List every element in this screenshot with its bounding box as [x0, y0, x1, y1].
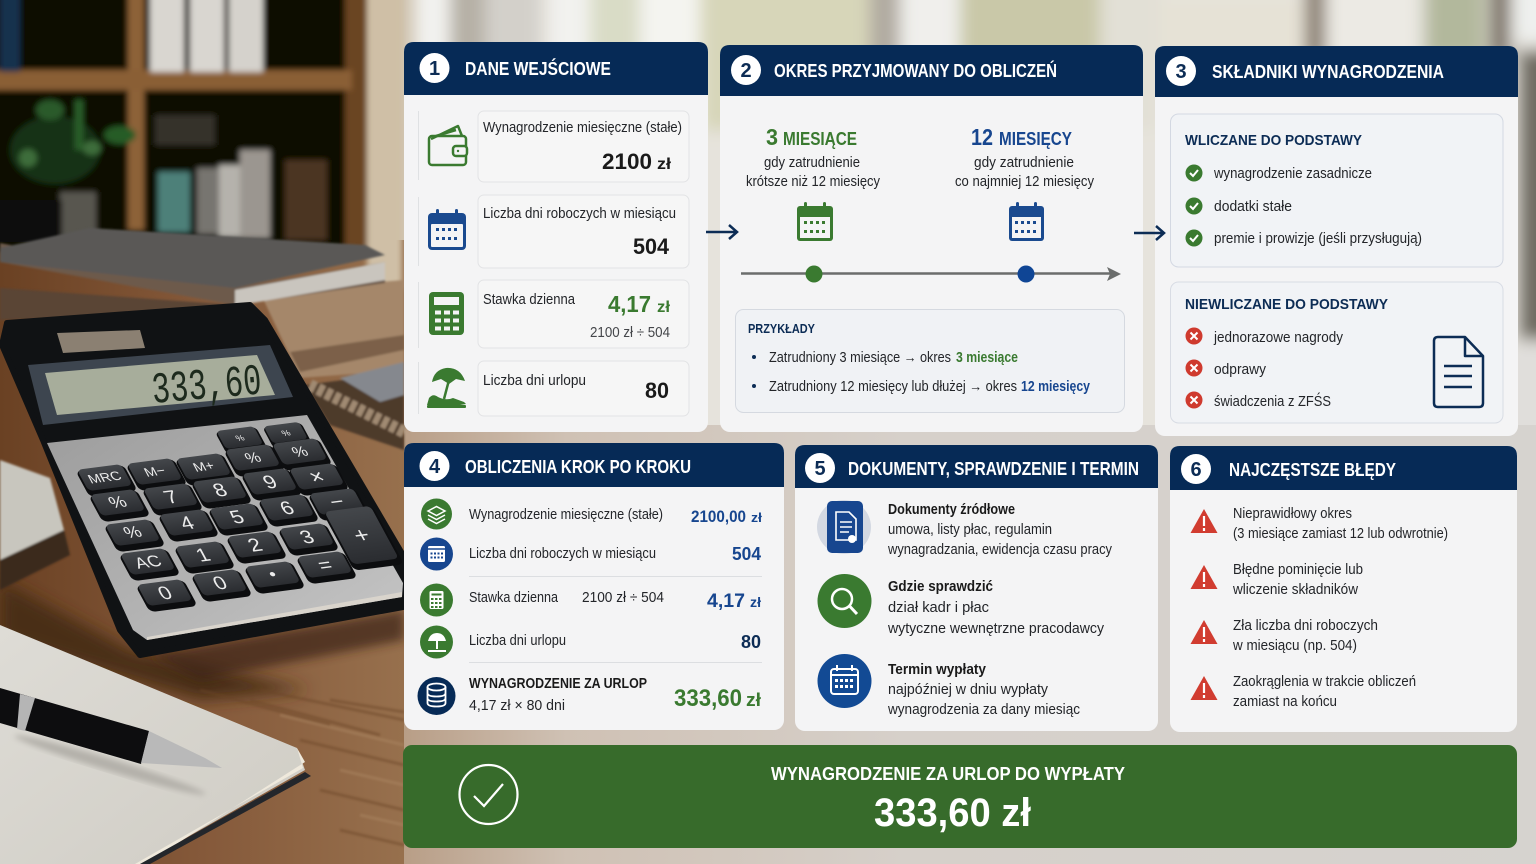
background: blurred window: [370, 0, 1536, 465]
row: liczba dni roboczych: [420, 538, 761, 570]
row: wynagrodzenie za urlop: WYNAGRODZENIE ZA URLOP: [469, 676, 647, 692]
background: bookshelf: [0, 0, 402, 290]
input: liczba dni urlopu: [478, 361, 689, 416]
background: grey book stack: [0, 228, 404, 590]
error: zła liczba dni: Zła liczba dni roboczych: [1233, 618, 1378, 634]
input: wynagrodzenie miesięczne: zł: [657, 156, 672, 173]
error: błędne pominięcie: [1190, 562, 1363, 598]
examples box: [736, 310, 1124, 412]
error: błędne pominięcie: wliczenie składników: [1232, 582, 1358, 598]
icon: calendar blue: [1009, 202, 1044, 241]
header 5: [795, 445, 1158, 488]
box: niewliczane do podstawy: NIEWLICZANE DO PODSTAWY: [1185, 296, 1388, 313]
box: niewliczane do podstawy: [1170, 282, 1503, 423]
item: gdzie sprawdzić: dział kadr i płac: [888, 600, 989, 616]
item: termin wypłaty: [818, 654, 1080, 718]
box: wliczane do podstawy: WLICZANE DO PODSTAWY: [1185, 132, 1362, 149]
row: liczba dni urlopu: [420, 626, 761, 658]
calculator keys: %: [242, 450, 264, 467]
input: liczba dni urlopu: Liczba dni urlopu: [483, 373, 586, 389]
header 6: NAJCZĘSTSZE BŁĘDY: [1229, 459, 1397, 480]
option: 3 miesiące: gdy zatrudnienie: [764, 155, 860, 171]
examples box: 12 miesięcy: [1021, 379, 1090, 395]
error: nieprawidłowy okres: Nieprawidłowy okres: [1233, 506, 1352, 522]
box: wliczane do podstawy: wynagrodzenie zasadnicze: [1213, 166, 1372, 182]
input: wynagrodzenie miesięczne: [478, 111, 689, 182]
row: stawka dzienna: 2100 zł ÷ 504: [582, 590, 664, 606]
box: wliczane do podstawy: dodatki stałe: [1214, 199, 1292, 215]
error: zła liczba dni: [1190, 618, 1378, 654]
examples box: PRZYKŁADY: [748, 321, 815, 336]
item: termin wypłaty: Termin wypłaty: [888, 662, 986, 678]
calculator keys: M+: [190, 458, 217, 474]
background: pale table: [395, 425, 1536, 864]
row: stawka dzienna: Stawka dzienna: [469, 590, 559, 606]
input: liczba dni roboczych: [478, 195, 689, 268]
icon: document outline: [1434, 337, 1483, 407]
option: 12 miesięcy: MIESIĘCY: [999, 129, 1072, 149]
arrow: panel 1 to 2: [706, 225, 737, 239]
panel 2: okres przyjmowany do obliczeń: [720, 45, 1143, 432]
panel 6: najczęstsze błędy: [1170, 446, 1517, 732]
header 4: [404, 443, 784, 487]
item: gdzie sprawdzić: wytyczne wewnętrzne pracodawcy: [887, 621, 1105, 637]
row: stawka dzienna: 4,17: [707, 591, 745, 612]
option: 3 miesiące: krótsze niż 12 miesięcy: [746, 174, 881, 190]
item: dokumenty źródłowe: umowa, listy płac, regulamin: [888, 522, 1052, 538]
option: 3 miesiące: [746, 124, 881, 190]
input: stawka dzienna: Stawka dzienna: [483, 292, 576, 308]
panel 4: obliczenia krok po kroku: [404, 443, 784, 730]
error: zaokrąglenia: Zaokrąglenia w trakcie obliczeń: [1233, 674, 1416, 690]
option: 12 miesięcy: 12: [971, 124, 993, 150]
calculator keys: +: [349, 524, 375, 548]
error: nieprawidłowy okres: (3 miesiące zamiast 12 lub odwrotnie): [1233, 526, 1448, 542]
result banner: WYNAGRODZENIE ZA URLOP DO WYPŁATY: [771, 764, 1125, 784]
input: wynagrodzenie miesięczne: 2100: [602, 149, 652, 174]
item: dokumenty źródłowe: [817, 500, 1113, 558]
input: stawka dzienna: [478, 280, 689, 348]
row: wynagrodzenie miesięczne: [421, 498, 762, 530]
result banner: 333,60 zł: [874, 791, 1031, 835]
header 1: [404, 42, 708, 95]
error: nieprawidłowy okres: [1190, 506, 1448, 542]
row: liczba dni roboczych: Liczba dni roboczych w miesiącu: [469, 546, 656, 562]
row: wynagrodzenie za urlop: [418, 676, 761, 715]
row: wynagrodzenie miesięczne: zł: [751, 510, 762, 525]
icon: wallet: [429, 126, 467, 165]
icon: beach umbrella: [427, 368, 466, 408]
calculator keys: MRC: [85, 468, 124, 486]
calculator keys: M−: [141, 463, 168, 479]
calculator keys: 9: [259, 472, 281, 493]
calculator keys: %: [289, 444, 311, 461]
header 3: 3: [1175, 61, 1187, 83]
calculator keys: ×: [304, 465, 329, 488]
examples box: Zatrudniony 3 miesiące → okres: [769, 350, 951, 366]
input: stawka dzienna: 4,17: [608, 291, 651, 317]
box: wliczane do podstawy: [1170, 114, 1503, 267]
background: wooden desk: [0, 240, 404, 864]
input: liczba dni roboczych: 504: [633, 234, 670, 259]
calculator keys: 1: [192, 545, 214, 566]
header 4: OBLICZENIA KROK PO KROKU: [465, 456, 691, 477]
input: stawka dzienna: zł: [657, 299, 671, 316]
row: liczba dni roboczych: 504: [732, 544, 761, 564]
row: wynagrodzenie za urlop: zł: [746, 690, 761, 710]
header 1: DANE WEJŚCIOWE: [465, 58, 611, 79]
calculator keys: •: [265, 565, 280, 583]
calculator keys: 4: [176, 513, 198, 534]
examples box: Zatrudniony 12 miesięcy lub dłużej → okres: [769, 379, 1017, 395]
option: 12 miesięcy: [955, 124, 1095, 190]
icon: check circle: [460, 765, 518, 824]
result banner: [403, 745, 1517, 848]
panel 1: dane wejściowe: [404, 42, 708, 432]
item: termin wypłaty: wynagrodzenia za dany miesiąc: [887, 702, 1080, 718]
option: 3 miesiące: MIESIĄCE: [783, 129, 857, 149]
calculator keys: −: [324, 490, 349, 513]
header 6: 6: [1190, 459, 1202, 481]
item: termin wypłaty: najpóźniej w dniu wypłaty: [888, 682, 1049, 698]
header 4: 4: [429, 456, 441, 478]
calculator keys: 0: [209, 573, 231, 594]
box: niewliczane do podstawy: jednorazowe nagrody: [1213, 330, 1344, 346]
header 2: [720, 45, 1143, 96]
arrow: panel 2 to 3: [1134, 226, 1164, 240]
row: wynagrodzenie miesięczne: Wynagrodzenie miesięczne (stałe): [469, 507, 663, 523]
panel 3: składniki wynagrodzenia: [1155, 46, 1518, 436]
row: stawka dzienna: zł: [750, 594, 761, 610]
option: 3 miesiące: 3: [766, 124, 778, 150]
option: 12 miesięcy: co najmniej 12 miesięcy: [955, 174, 1095, 190]
background: notebook and pen: [0, 625, 311, 864]
error: zaokrąglenia: [1190, 674, 1416, 710]
row: stawka dzienna: [420, 584, 761, 616]
box: niewliczane do podstawy: świadczenia z ZFŚS: [1214, 392, 1331, 410]
input: stawka dzienna: 2100 zł ÷ 504: [590, 325, 670, 341]
item: gdzie sprawdzić: Gdzie sprawdzić: [888, 579, 993, 595]
header 2: OKRES PRZYJMOWANY DO OBLICZEŃ: [774, 60, 1057, 81]
row: liczba dni urlopu: Liczba dni urlopu: [469, 633, 566, 649]
option: 12 miesięcy: gdy zatrudnienie: [974, 155, 1074, 171]
calculator keys: %: [105, 492, 130, 512]
item: gdzie sprawdzić: [818, 574, 1105, 637]
item: dokumenty źródłowe: Dokumenty źródłowe: [888, 502, 1015, 518]
box: niewliczane do podstawy: odprawy: [1214, 362, 1267, 378]
item: dokumenty źródłowe: wynagradzania, ewidencja czasu pracy: [887, 542, 1113, 558]
error: zaokrąglenia: zamiast na końcu: [1233, 694, 1337, 710]
calculator keys: =: [314, 555, 337, 576]
calculator keys: %: [280, 428, 292, 438]
calculator keys: %: [120, 522, 145, 542]
calculator keys: 6: [276, 498, 298, 519]
calculator display: 333,60: [150, 358, 264, 417]
panel 5: dokumenty, sprawdzenie i termin: [795, 445, 1158, 731]
input: liczba dni roboczych: Liczba dni roboczych w miesiącu: [483, 206, 676, 222]
row: liczba dni urlopu: 80: [741, 632, 761, 652]
calculator keys: 5: [226, 507, 248, 528]
row: wynagrodzenie za urlop: 333,60: [674, 685, 742, 712]
row: wynagrodzenie miesięczne: 2100,00: [691, 507, 746, 526]
icon: calendar blue: [428, 209, 466, 250]
box: wliczane do podstawy: premie i prowizje (jeśli przysługują): [1214, 231, 1422, 247]
header 1: 1: [429, 58, 440, 80]
calculator keys: 7: [160, 487, 182, 508]
calculator display: [45, 355, 275, 417]
header 5: 5: [814, 458, 826, 480]
calculator keys: [75, 422, 404, 612]
calculator keys: 0: [154, 583, 176, 604]
error: błędne pominięcie: Błędne pominięcie lub: [1233, 562, 1363, 578]
icon: calendar green: [797, 202, 833, 241]
examples box: 3 miesiące: [956, 350, 1018, 366]
illustration: calculator: [2, 305, 404, 655]
header 5: DOKUMENTY, SPRAWDZENIE I TERMIN: [848, 458, 1139, 479]
calculator keys: %: [234, 433, 246, 443]
calculator keys: AC: [131, 552, 165, 572]
error: zła liczba dni: w miesiącu (np. 504): [1232, 638, 1357, 654]
timeline: [741, 266, 1121, 282]
header 3: SKŁADNIKI WYNAGRODZENIA: [1212, 61, 1444, 82]
header 2: 2: [740, 60, 752, 82]
icon: calculator green: [429, 292, 464, 335]
calculator keys: 3: [296, 527, 318, 548]
input: liczba dni urlopu: 80: [645, 378, 669, 403]
header 6: [1170, 446, 1517, 490]
header 3: [1155, 46, 1518, 97]
calculator keys: 8: [209, 480, 231, 501]
row: wynagrodzenie za urlop: 4,17 zł × 80 dni: [469, 698, 565, 714]
input: wynagrodzenie miesięczne: Wynagrodzenie miesięczne (stałe): [483, 120, 682, 136]
calculator keys: 2: [244, 535, 266, 556]
